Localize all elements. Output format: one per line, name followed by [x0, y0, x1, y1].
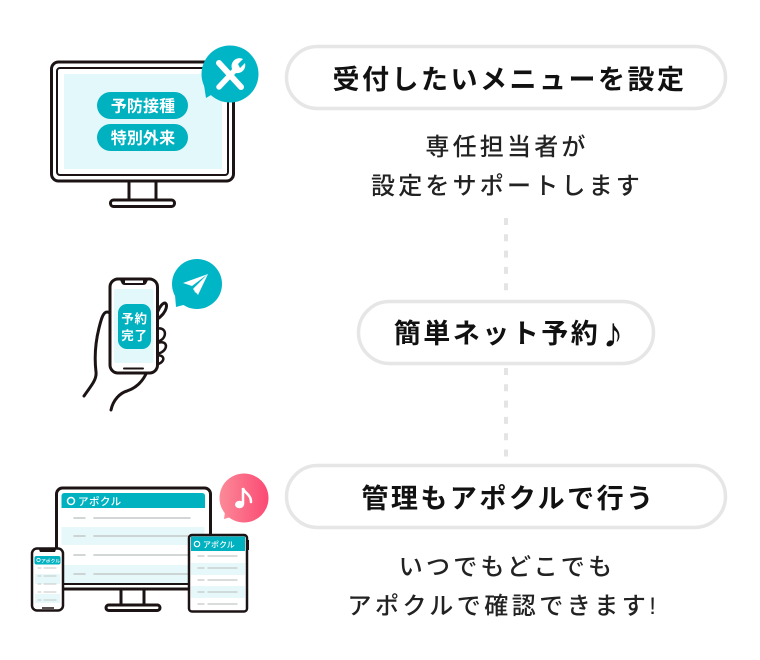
- monitor body: [52, 62, 234, 206]
- smartphone: [32, 548, 63, 610]
- text block: 専任担当者が設定をサポートします: 専任担当者が: [425, 134, 589, 161]
- icon: paper plane speech bubble: [172, 259, 222, 309]
- text block: 専任担当者が設定をサポートします: 設定をサポートします: [371, 173, 643, 200]
- illustration: hand holding smartphone: [84, 259, 222, 410]
- smartphone: アポクル: [41, 558, 60, 564]
- menu button: 予防接種: 予防接種: [111, 98, 175, 116]
- text block: いつでもどこでも アポクルで確認できます!: いつでもどこでも: [399, 554, 615, 581]
- heading pill: 管理もアポクルで行う: [286, 466, 726, 528]
- icon: music note speech bubble: [220, 474, 268, 522]
- menu button: 予防接種: [97, 92, 188, 119]
- illustration: devices showing アポクル: [32, 474, 268, 612]
- desktop monitor: [56, 488, 210, 610]
- smartphone: 完了: [121, 328, 148, 343]
- heading pill: 受付したいメニューを設定: [286, 46, 726, 108]
- heading pill: 簡単ネット予約♪: 簡単ネット予約: [394, 319, 600, 349]
- text block: いつでもどこでも アポクルで確認できます!: [348, 554, 659, 620]
- desktop monitor: アポクル: [78, 496, 122, 508]
- tablet: アポクル: [203, 540, 235, 550]
- tablet: [189, 535, 248, 612]
- menu button: 特別外来: [97, 124, 188, 151]
- text block: 専任担当者が設定をサポートします: [371, 134, 643, 200]
- smartphone: 予約: [121, 311, 148, 326]
- fingers: [148, 326, 168, 366]
- heading pill: 受付したいメニューを設定: 受付したいメニューを設定: [332, 65, 686, 95]
- illustration: desktop monitor with menu settings: [52, 46, 258, 206]
- text block: いつでもどこでも アポクルで確認できます!: アポクルで確認できます!: [348, 593, 659, 620]
- heading pill: 簡単ネット予約♪: ♪: [602, 309, 624, 356]
- smartphone: [110, 279, 158, 373]
- heading pill: 簡単ネット予約♪: [358, 302, 654, 364]
- heading pill: 管理もアポクルで行う: 管理もアポクルで行う: [361, 484, 656, 514]
- icon: tools speech bubble: [202, 46, 258, 102]
- hand: [84, 303, 166, 410]
- menu button: 特別外来: 特別外来: [111, 128, 175, 148]
